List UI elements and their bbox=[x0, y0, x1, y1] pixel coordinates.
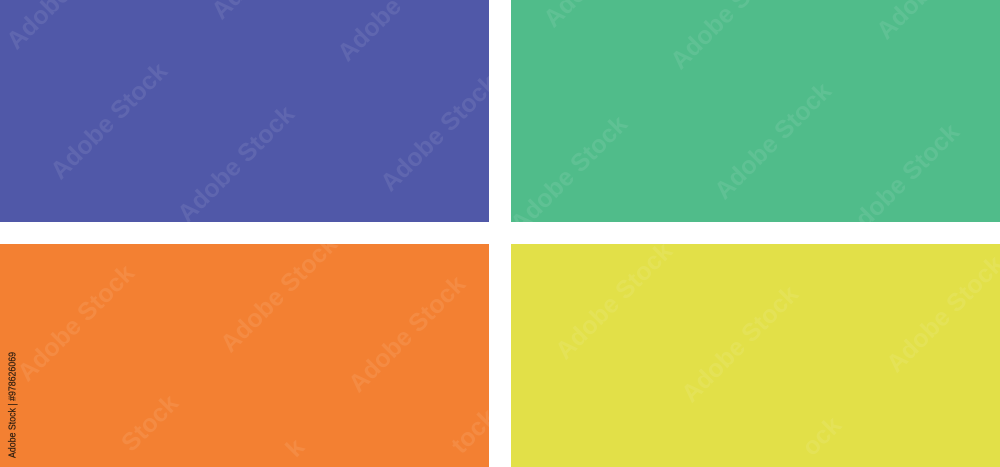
watermark pattern: tock bbox=[446, 403, 502, 459]
watermark pattern: Adobe Stock bbox=[375, 69, 503, 197]
panel: blue, top left bbox=[0, 0, 489, 222]
watermark pattern: Adobe Stock bbox=[343, 270, 471, 398]
watermark pattern: Adobe Stock bbox=[45, 57, 173, 185]
watermark pattern: Stock bbox=[116, 389, 184, 457]
watermark pattern: k bbox=[280, 433, 310, 463]
watermark pattern: Adobe Stock bbox=[12, 259, 140, 387]
watermark pattern: Adobe Stock bbox=[550, 237, 678, 365]
stock attribution text: Adobe Stock | #978626069 bbox=[6, 352, 18, 458]
watermark pattern: ock bbox=[797, 411, 847, 461]
watermark pattern: Adobe Stock bbox=[709, 77, 837, 205]
watermark pattern: Adobe Stock bbox=[676, 280, 804, 408]
panel: orange, bottom left bbox=[0, 244, 489, 467]
panel: yellow, bottom right bbox=[511, 244, 1000, 467]
panel: green, top right bbox=[511, 0, 1000, 222]
watermark pattern: Adobe Stock bbox=[172, 100, 300, 228]
watermark pattern: Adobe Stock bbox=[505, 110, 633, 238]
watermark pattern: Adobe Stock bbox=[215, 230, 343, 358]
watermark pattern: Adobe Stock bbox=[837, 118, 965, 246]
